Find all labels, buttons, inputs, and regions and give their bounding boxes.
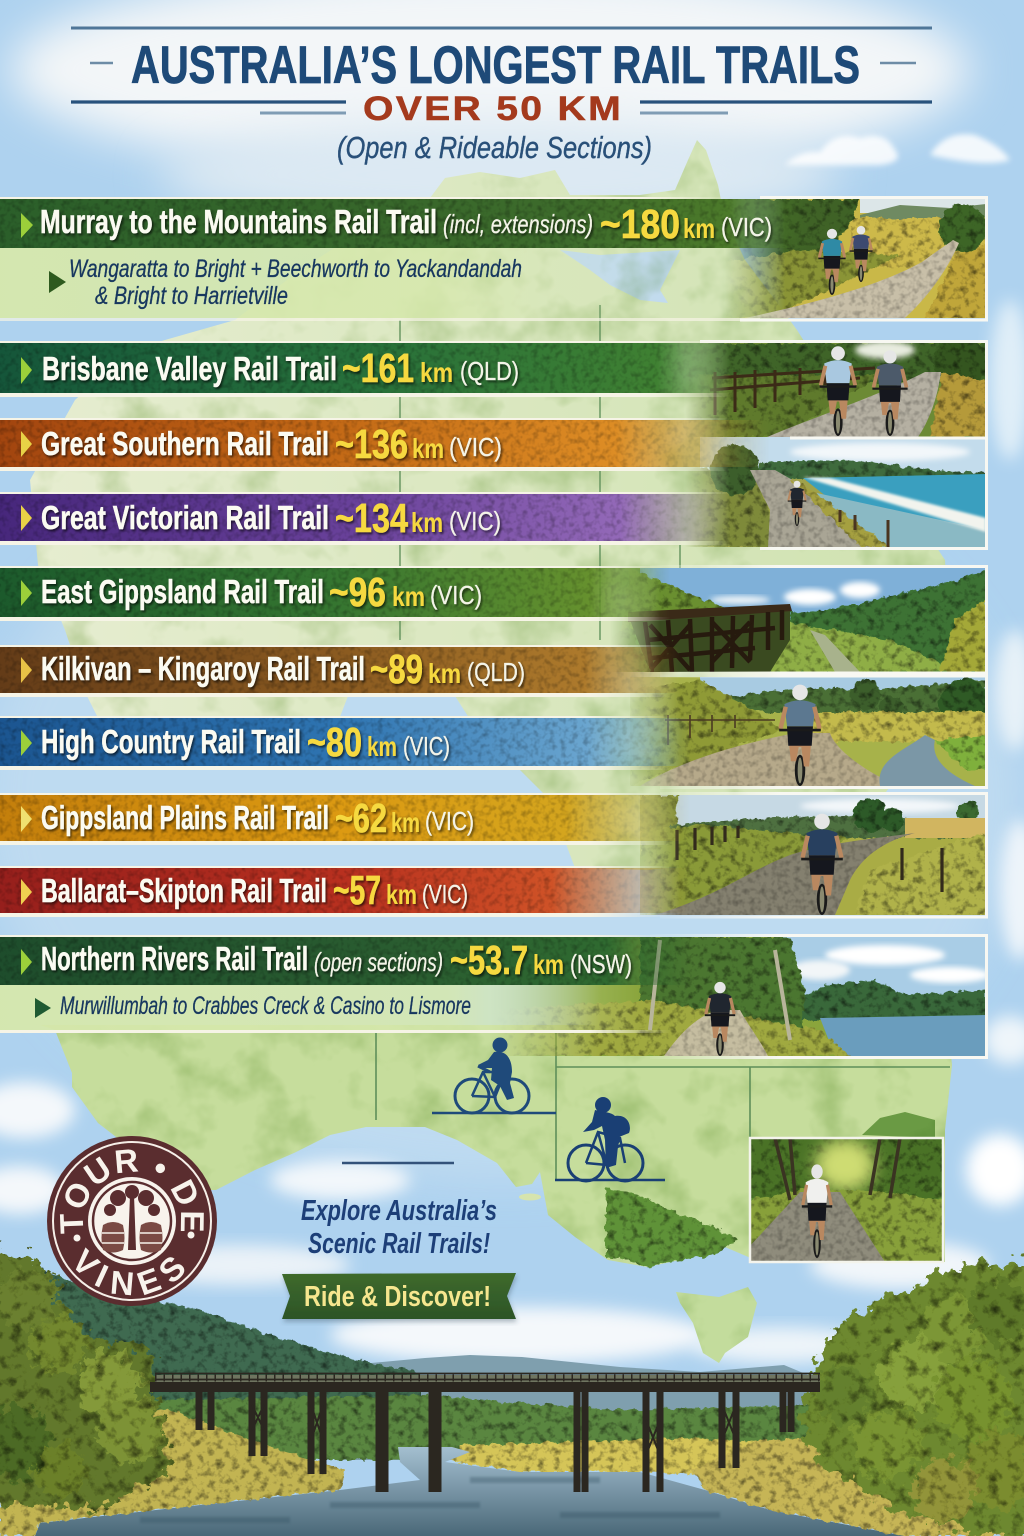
trail name and distance: Murray to the Mountains Rail Trail [40,203,437,240]
sub-route text [69,255,522,310]
panel: Kilkivan–Kingaroy Rail Trail: Kilkivan – Kingaroy Rail Trail [41,650,365,687]
logo badge: Tour de Vines [47,1136,217,1306]
callout text [301,1195,497,1260]
panel: High Country Rail Trail: km [367,731,397,762]
panel: Ballarat–Skipton Rail Trail: Ballarat–Skipton Rail Trail [41,872,327,909]
map: southern Australia [40,1025,952,1267]
panel: Kilkivan–Kingaroy Rail Trail: ~89 [370,646,423,692]
panel: Great Southern Rail Trail: (VIC) [449,432,502,462]
panel: Ballarat–Skipton Rail Trail: km [386,879,417,910]
panel: Great Southern Rail Trail: km [412,433,444,464]
panel: Great Southern Rail Trail: Great Southern Rail Trail [41,425,329,462]
panel: Brisbane Valley Rail Trail: km [420,357,453,388]
left trees [0,1245,170,1510]
far mountains [350,1355,820,1460]
trail name and distance [40,201,772,247]
panel: Brisbane Valley Rail Trail [0,341,986,438]
bottom landscape [0,1245,1024,1536]
photo: riders on grassy path [725,199,987,318]
inset photo: forest trail [735,1138,943,1262]
panel: Northern Rivers Rail Trail: ~53.7 [450,937,528,983]
photo: river and forest trail [490,937,990,1056]
panel: Northern Rivers Rail Trail: (NSW) [570,949,632,979]
right trees [800,1260,1024,1536]
sub-route text: Wangaratta to Bright + Beechworth to Yackandandah [69,255,522,283]
near forested hill [20,1262,420,1460]
panel: Northern Rivers Rail Trail: km [533,949,564,980]
panel: Murray to the Mountains Rail Trail [0,197,986,321]
photo: river path [630,677,991,786]
panel: High Country Rail Trail: High Country Rail Trail [41,723,301,760]
badge text top: TOUR • DE [60,1150,204,1234]
panel: Brisbane Valley Rail Trail: (QLD) [460,356,519,386]
trail name and distance: (VIC) [721,212,772,242]
panel: Ballarat–Skipton Rail Trail [0,794,986,917]
qualifier: (Open & Rideable Sections) [337,130,652,165]
divider above callout [342,1162,454,1164]
badge text bottom: VINES [76,1247,184,1296]
panel: Great Southern Rail Trail [0,418,770,471]
panel: Northern Rivers Rail Trail: Murwillumbah to Crabbes Creck & Casino to Lismore [60,992,471,1020]
panel: East Gippsland Rail Trail: (VIC) [430,580,482,610]
panel: High Country Rail Trail: (VIC) [403,731,450,761]
panel: Gippsland Plains Rail Trail: Gippsland Plains Rail Trail [41,799,329,836]
map: upper Australia [30,140,950,870]
left bank [0,1410,345,1536]
panel: Gippsland Plains Rail Trail: (VIC) [425,806,474,836]
panel: Great Victorian Rail Trail: Great Victorian Rail Trail [41,499,329,536]
panel: East Gippsland Rail Trail [0,566,986,673]
callout text: Scenic Rail Trails! [308,1228,490,1260]
panel: Brisbane Valley Rail Trail: ~161 [342,345,414,391]
banner: Ride & Discover: Ride & Discover! [304,1281,491,1313]
photo: timber trestle valley [610,568,986,672]
trail name and distance: km [683,213,715,244]
callout text: Explore Australia’s [301,1195,497,1227]
arrow [21,213,33,238]
panel: East Gippsland Rail Trail: East Gippsland Rail Trail [41,573,324,610]
panel: Great Victorian Rail Trail: km [411,507,443,538]
panel: Ballarat–Skipton Rail Trail: (VIC) [422,879,468,909]
panel: High Country Rail Trail: ~80 [307,719,362,765]
panel: Brisbane Valley Rail Trail: Brisbane Valley Rail Trail [42,350,337,387]
panel: High Country Rail Trail [0,676,986,788]
right bank [690,1430,1024,1536]
cyclist silhouette on map, lower [555,1097,665,1181]
panel: Great Southern Rail Trail: ~136 [335,421,408,467]
panel: Gippsland Plains Rail Trail: km [391,807,420,838]
panel: Gippsland Plains Rail Trail [0,793,690,845]
panel: Northern Rivers Rail Trail [0,935,986,1058]
map: state borders [400,305,680,640]
banner: Ride & Discover [282,1273,516,1319]
map: Tasmania [676,1287,757,1363]
sub-route text: & Bright to Harrietville [95,282,288,310]
trail name and distance: (incl, extensions) [443,209,593,239]
cyclist silhouette on map, upper [432,1038,556,1113]
panel: Northern Rivers Rail Trail: Northern Rivers Rail Trail [41,940,308,977]
forest band under bridge [150,1395,820,1460]
icon: tree and wine barrels [102,1185,162,1252]
panel: Great Victorian Rail Trail: ~134 [335,495,408,541]
panel: Kilkivan–Kingaroy Rail Trail: km [428,658,461,689]
panel: Great Victorian Rail Trail [0,437,986,548]
panel: Great Victorian Rail Trail: (VIC) [449,506,501,536]
photo: fenced farm road [640,795,986,915]
panel: Kilkivan–Kingaroy Rail Trail: (QLD) [467,657,525,687]
river [35,1447,905,1536]
panel: Northern Rivers Rail Trail: (open sections) [314,947,443,977]
photo: coastal path and beach [680,437,986,547]
panel: Kilkivan–Kingaroy Rail Trail [0,645,680,697]
subtitle: OVER 50 KM [363,90,623,128]
panel: Ballarat–Skipton Rail Trail: ~57 [333,867,381,913]
panel: East Gippsland Rail Trail: km [392,581,425,612]
photo: riders beside timber fence [680,336,986,437]
trail name and distance: ~180 [600,201,680,247]
title header [71,28,932,165]
central grassy bank [450,1438,800,1480]
railway bridge [150,1374,820,1492]
sub-route note [49,271,66,293]
panel: Gippsland Plains Rail Trail: ~62 [335,795,387,841]
panel: East Gippsland Rail Trail: ~96 [329,569,386,615]
